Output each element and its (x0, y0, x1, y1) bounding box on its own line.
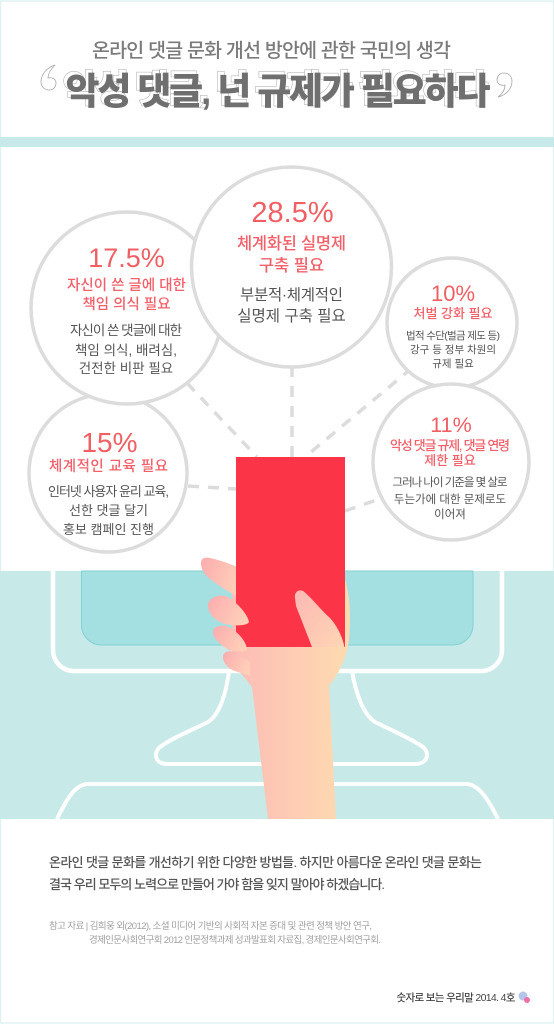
circle: 11%: 그러나 나이 기준을 몇 살로 (392, 476, 508, 489)
circle: 17.5%: 자신이 쓴 글에 대한 (67, 277, 186, 294)
circle: 10%: 강구 등 정부 차원의 (410, 344, 496, 356)
circle: 28.5% (192, 167, 392, 367)
monitor illustration panel (0, 571, 554, 819)
circle: 17.5%: 건전한 비판 필요 (79, 361, 173, 376)
circle: 11%: 두는가에 대한 문제로도 (394, 493, 506, 506)
red card (236, 457, 345, 647)
closing statement (49, 855, 482, 892)
circle: 15%: 선한 댓글 달기 (69, 503, 148, 518)
main title: 악성 댓글, 넌 규제가 필요하다 (63, 68, 488, 110)
closing statement: 온라인 댓글 문화를 개선하기 위한 다양한 방법들. 하지만 아름다운 온라인 댓글 문화는 (49, 855, 482, 870)
circle: 11%: 이어져 (434, 508, 466, 521)
index finger (201, 558, 240, 598)
circle: 17.5%: 책임 의식 필요 (82, 296, 171, 313)
circle: 11% (373, 384, 529, 540)
footer credit: 숫자로 보는 우리말 2014. 4호 (396, 991, 516, 1004)
references (49, 920, 381, 946)
circle: 10%: 처벌 강화 필요 (414, 306, 493, 321)
references: 경제인문사회연구회 2012 인문정책과제 성과발표회 자료집, 경제인문사회연구회. (89, 934, 381, 946)
circle: 10%: 10% (431, 281, 475, 306)
circle: 15%: 체계적인 교육 필요 (49, 458, 168, 475)
circle: 28.5%: 실명제 구축 필요 (237, 307, 346, 325)
subtitle: 온라인 댓글 문화 개선 방안에 관한 국민의 생각 (92, 40, 451, 62)
references: 참고 자료 | 김희웅 외(2012), 소셜 미디어 기반의 사회적 자본 증대 및 관련 정책 방안 연구, (49, 920, 372, 932)
circle: 10%: 법적 수단(벌금 제도 등) (406, 330, 500, 342)
circle: 17.5% (31, 212, 223, 404)
circle: 17.5%: 17.5% (88, 243, 165, 273)
circle: 11%: 악성 댓글 규제, 댓글 연령 (390, 438, 510, 453)
circle: 28.5%: 체계화된 실명제 (237, 234, 346, 253)
circle: 15% (29, 394, 187, 552)
dashed connector lines (187, 366, 412, 511)
circle: 17.5%: 자신이 쓴 댓글에 대한 (70, 323, 182, 338)
circle: 10%: 규제 필요 (432, 358, 474, 370)
circle: 28.5%: 부분적·체계적인 (240, 286, 343, 304)
icon: left quotation mark (41, 65, 56, 90)
little finger (223, 651, 250, 676)
main title: 악성 댓글, 넌 규제가 필요하다 (66, 71, 490, 112)
circle: 10% (387, 258, 517, 388)
circle: 11%: 제한 필요 (424, 453, 476, 468)
main title: 악성 댓글, 넌 규제가 필요하다 (63, 68, 488, 110)
circle: 11%: 11% (430, 413, 472, 437)
middle finger (208, 596, 249, 625)
circle: 17.5%: 책임 의식, 배려심, (75, 343, 177, 358)
circle: 28.5%: 구축 필요 (259, 256, 324, 275)
circle: 15%: 15% (81, 427, 138, 458)
icon: right quotation mark (497, 73, 512, 97)
circle: 15%: 홍보 캠페인 진행 (63, 522, 154, 537)
circle: 15%: 인터넷 사용자 윤리 교육, (48, 484, 169, 499)
closing statement: 결국 우리 모두의 노력으로 만들어 가야 함을 잊지 말아야 하겠습니다. (49, 877, 385, 892)
illustration: hand holding red card (201, 457, 350, 819)
ring finger (213, 626, 247, 652)
thumb (295, 590, 345, 650)
circle: 28.5%: 28.5% (251, 197, 334, 229)
hand palm and arm (232, 580, 350, 819)
icon: footer logo (518, 992, 530, 1003)
